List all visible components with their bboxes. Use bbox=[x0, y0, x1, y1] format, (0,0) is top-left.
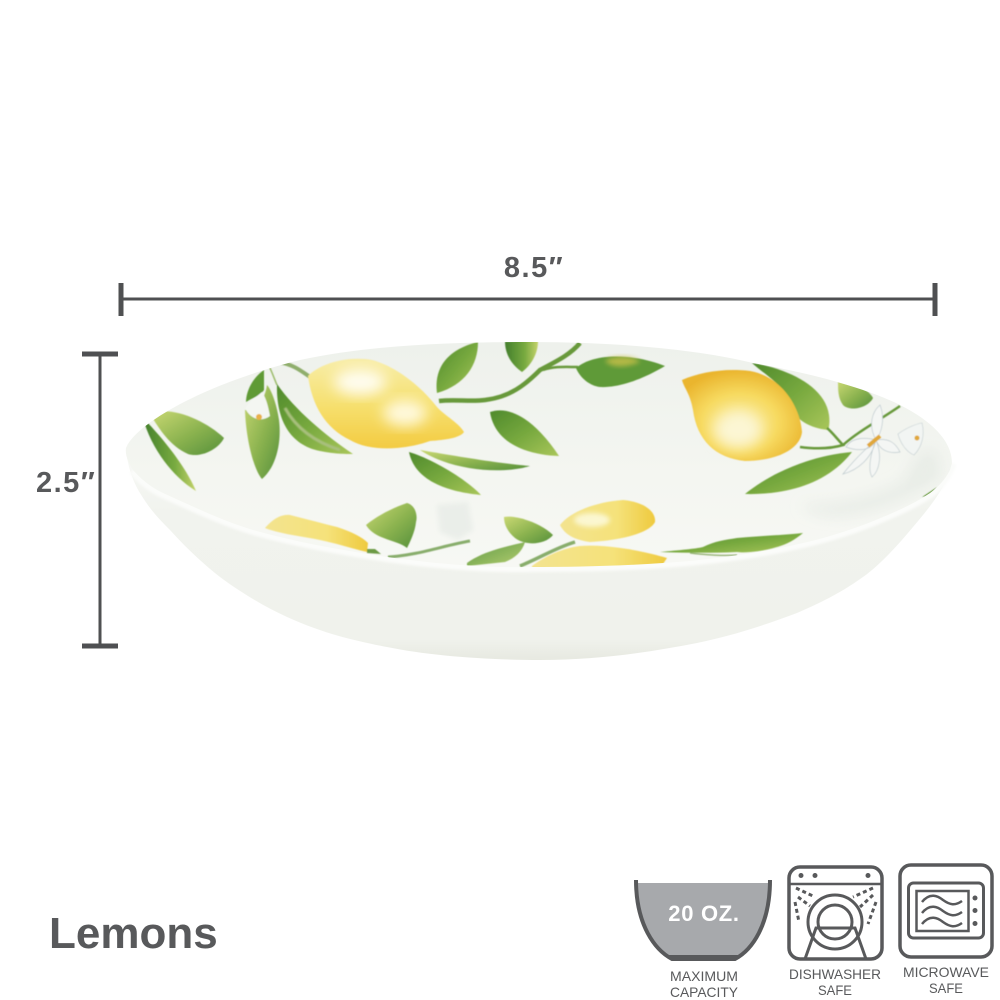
central branch bbox=[439, 343, 580, 401]
icon: dishwasher safe bbox=[789, 867, 882, 998]
bottom leaf near stem bbox=[467, 542, 525, 566]
bowl outer body bbox=[126, 450, 952, 660]
slender leaf under sprig bbox=[277, 384, 353, 454]
long bottom right leaf bbox=[660, 533, 803, 555]
sprig with bud and two leaves bbox=[245, 366, 280, 479]
bottom left leaf bbox=[366, 503, 417, 548]
lemon 1 bbox=[308, 359, 464, 448]
icon: maximum capacity 20 oz bowl: 20 OZ. bbox=[668, 901, 740, 926]
small upper right leaf bbox=[838, 381, 873, 409]
product name: Lemons bbox=[49, 909, 218, 958]
lemon 1 stem bbox=[278, 362, 310, 377]
icon: dishwasher safe: SAFE bbox=[818, 982, 852, 998]
interior shading bbox=[832, 457, 936, 512]
icon: maximum capacity 20 oz bowl: MAXIMUM bbox=[670, 968, 738, 984]
icon: microwave safe bbox=[900, 865, 992, 996]
height dimension: 2.5 inches: 2.5″ bbox=[36, 467, 96, 499]
icon: maximum capacity 20 oz bowl bbox=[636, 880, 770, 1000]
lemon 3 (bottom left) bbox=[265, 515, 381, 554]
bottom branch bbox=[520, 542, 575, 566]
infographic canvas bbox=[37, 256, 994, 997]
right leaf highlight bbox=[605, 357, 640, 366]
lower right long leaf bbox=[745, 452, 852, 494]
width dimension: 8.5 inches: 8.5″ bbox=[504, 252, 564, 284]
bottom stem bbox=[388, 541, 470, 557]
leaf tip at right rim bbox=[922, 487, 937, 497]
lemon blossoms bbox=[843, 405, 923, 477]
lemon 2 bbox=[682, 370, 802, 461]
printed lemon decoration bbox=[143, 341, 941, 570]
bottom centre leaf bbox=[504, 517, 553, 543]
pair of leaves below lemon 1 bbox=[409, 450, 530, 495]
branch leaf: top bbox=[505, 341, 538, 372]
lemon-pattern bowl bbox=[126, 341, 952, 660]
icon: microwave safe: SAFE bbox=[929, 980, 963, 996]
ghost reflection bbox=[440, 504, 471, 538]
icon: dishwasher safe: DISHWASHER bbox=[789, 966, 881, 982]
lemon 4 bbox=[560, 500, 655, 542]
leaf behind lemon 2 bbox=[752, 363, 829, 430]
bowl interior bbox=[126, 342, 952, 567]
icon: microwave safe: MICROWAVE bbox=[903, 964, 989, 980]
rim highlight bbox=[133, 463, 952, 567]
far-left leaves bbox=[143, 411, 224, 491]
branch leaf: lower bbox=[490, 410, 559, 456]
branch twig to right leaf bbox=[543, 367, 578, 370]
lemon 5 bbox=[532, 546, 667, 570]
branch leaf: upper left bbox=[437, 342, 478, 393]
twig to blossoms bbox=[800, 406, 900, 448]
icon: maximum capacity 20 oz bowl: CAPACITY bbox=[670, 984, 739, 1000]
branch leaf: right bbox=[576, 356, 665, 387]
